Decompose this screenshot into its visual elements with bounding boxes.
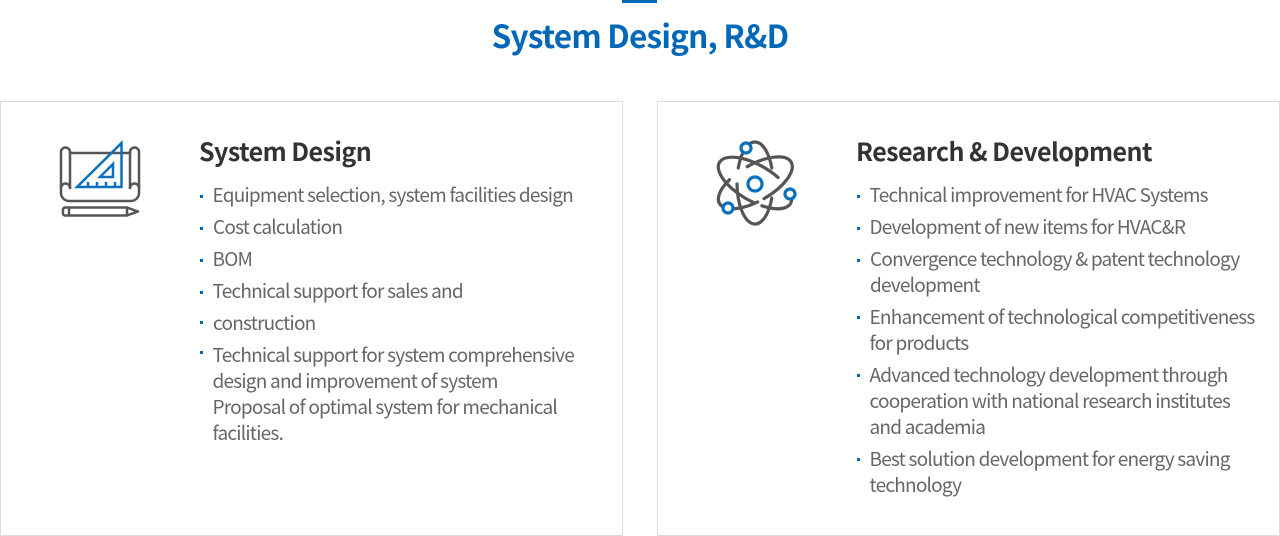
item: Best solution development for energy saving (870, 445, 1230, 472)
panel: system design (0, 101, 623, 536)
item: Technical support for sales and (212, 277, 463, 304)
item: cooperation with national research institutes (870, 387, 1230, 414)
list: research and development (857, 181, 1255, 498)
item (870, 445, 1230, 498)
bullet (200, 351, 203, 354)
item: facilities. (212, 419, 283, 446)
item: Advanced technology development through (870, 361, 1228, 388)
item (870, 361, 1230, 440)
bullet (857, 374, 860, 377)
item: design and improvement of system (212, 367, 498, 394)
top accent bar (622, 0, 657, 3)
heading: system design: System Design (199, 133, 371, 169)
item: for products (870, 329, 968, 356)
bullet (200, 195, 203, 198)
bullet (857, 458, 860, 461)
item (212, 341, 574, 446)
bullet (200, 227, 203, 230)
bullet (857, 259, 860, 262)
bullet (200, 291, 203, 294)
heading: research and development: Research & Development (856, 133, 1152, 169)
panel: research and development (657, 101, 1280, 536)
bullet (857, 195, 860, 198)
item: Technical improvement for HVAC Systems (870, 181, 1208, 208)
item: Proposal of optimal system for mechanical (212, 393, 557, 420)
bullet (200, 321, 203, 324)
item: BOM (212, 245, 252, 272)
item: Cost calculation (213, 213, 342, 240)
title: System Design, R&D (492, 12, 788, 58)
item: technology (870, 471, 961, 498)
item: and academia (870, 413, 985, 440)
icon: blueprint with set square and pencil (60, 140, 140, 217)
item: construction (213, 309, 316, 336)
bullet (200, 259, 203, 262)
bullet (857, 227, 860, 230)
item: development (870, 271, 980, 298)
item: Equipment selection, system facilities design (212, 181, 573, 208)
item (870, 303, 1255, 356)
item: Enhancement of technological competitiveness (870, 303, 1254, 330)
item: Development of new items for HVAC&R (870, 213, 1185, 240)
list: system design (200, 181, 574, 446)
icon: atom (716, 140, 797, 226)
item: Technical support for system comprehensive (212, 341, 574, 368)
item (870, 245, 1240, 298)
item: Convergence technology & patent technology (870, 245, 1239, 272)
bullet (857, 316, 860, 319)
